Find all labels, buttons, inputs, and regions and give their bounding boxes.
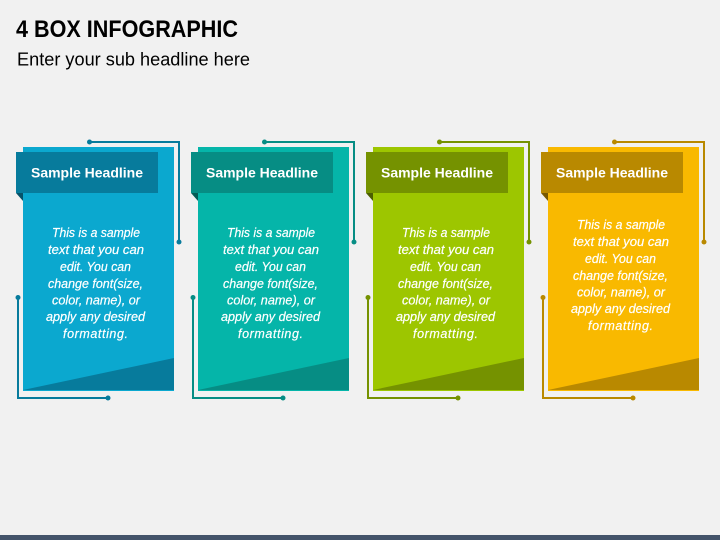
headline box 1: Sample Headline	[31, 164, 143, 180]
body text box 4	[571, 218, 671, 333]
card body box 1	[23, 147, 174, 391]
connector lines box 3	[366, 140, 532, 400]
body text box 2: color, name), or	[227, 294, 316, 308]
body text box 1: edit. You can	[60, 260, 131, 274]
body text box 1: apply any desired	[46, 310, 146, 324]
body text box 4: edit. You can	[585, 252, 656, 266]
body text box 2: apply any desired	[221, 310, 321, 324]
subtitle: Enter your sub headline here	[17, 48, 250, 70]
panel: box 2 teal	[190, 140, 356, 400]
body text box 3: text that you can	[398, 243, 494, 257]
header fold box 1	[16, 193, 23, 201]
body text box 2	[221, 226, 321, 341]
body text box 4: change font(size,	[573, 269, 668, 283]
title: 4 BOX INFOGRAPHIC	[16, 16, 238, 43]
header fold box 3	[366, 193, 373, 201]
body text box 2: This is a sample	[227, 226, 315, 240]
header fold box 2	[191, 193, 198, 201]
body text box 2: edit. You can	[235, 260, 306, 274]
body text box 1: color, name), or	[52, 294, 141, 308]
body text box 2: change font(size,	[223, 277, 318, 291]
headline box 4: Sample Headline	[556, 164, 668, 180]
body text box 2: text that you can	[223, 243, 319, 257]
header band box 3	[366, 152, 508, 193]
panel: box 1 blue	[16, 140, 182, 400]
bottom wedge box 1	[23, 358, 174, 390]
body text box 4: apply any desired	[571, 302, 671, 316]
body text box 2: formatting.	[238, 327, 303, 341]
card body box 2	[198, 147, 349, 391]
header fold box 4	[541, 193, 548, 201]
connector lines box 1	[16, 140, 182, 400]
headline box 2: Sample Headline	[206, 164, 318, 180]
card body box 4	[548, 147, 699, 391]
headline box 3: Sample Headline	[381, 164, 493, 180]
body text box 3: This is a sample	[402, 226, 490, 240]
body text box 3: change font(size,	[398, 277, 493, 291]
header band box 2	[191, 152, 333, 193]
body text box 1: This is a sample	[52, 226, 140, 240]
panel: box 4 amber	[540, 140, 706, 400]
body text box 4: formatting.	[588, 319, 653, 333]
body text box 3: formatting.	[413, 327, 478, 341]
body text box 4: This is a sample	[577, 218, 665, 232]
body text box 3: edit. You can	[410, 260, 481, 274]
card body box 3	[373, 147, 524, 391]
header band box 4	[541, 152, 683, 193]
body text box 4: color, name), or	[577, 286, 666, 300]
header band box 1	[16, 152, 158, 193]
body text box 1: formatting.	[63, 327, 128, 341]
body text box 3: apply any desired	[396, 310, 496, 324]
body text box 3	[396, 226, 496, 341]
bottom wedge box 4	[548, 358, 699, 390]
footer bar	[0, 535, 720, 540]
body text box 4: text that you can	[573, 235, 669, 249]
connector lines box 4	[540, 140, 706, 400]
body text box 1: change font(size,	[48, 277, 143, 291]
connector lines box 2	[190, 140, 356, 400]
body text box 1: text that you can	[48, 243, 144, 257]
body text box 1	[46, 226, 146, 341]
body text box 3: color, name), or	[402, 294, 491, 308]
panel: box 3 green	[366, 140, 532, 400]
bottom wedge box 2	[198, 358, 349, 390]
bottom wedge box 3	[373, 358, 524, 390]
